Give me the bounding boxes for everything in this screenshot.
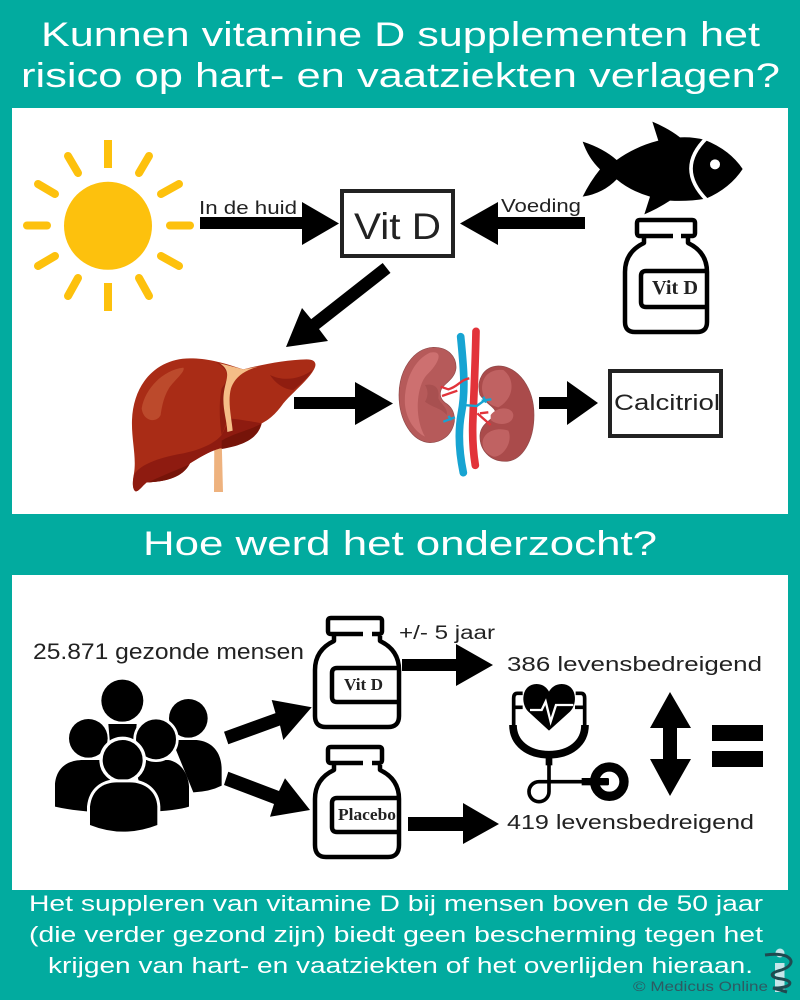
icon: Vit D bottle, study: Vit D [344, 675, 383, 694]
title: risico op hart- en vaatziekten verlagen? [21, 57, 780, 95]
icon: liver [132, 358, 315, 492]
arrow: food to vitamin D [460, 202, 585, 245]
conclusion text: (die verder gezond zijn) biedt geen bescherming tegen het [29, 922, 763, 947]
box: Calcitriol: Calcitriol [614, 390, 720, 415]
arrow: to placebo group [224, 772, 310, 817]
icon: fish [583, 122, 743, 214]
label: placebo outcome: 419 levensbedreigend [507, 812, 754, 834]
title: Kunnen vitamine D supplementen het [41, 16, 761, 54]
arrow: liver to kidneys [294, 382, 393, 425]
conclusion text: krijgen van hart- en vaatziekten of het overlijden hieraan. [48, 953, 753, 978]
panel: vitamin D pathway [12, 108, 788, 514]
icon: stethoscope with heart [513, 684, 624, 802]
label: Vit D outcome: 386 levensbedreigend [507, 654, 762, 676]
icon: group of people [55, 680, 222, 832]
icon: kidneys [399, 331, 534, 473]
box: Vit D [342, 191, 453, 256]
arrow: skin to vitamin D [200, 202, 339, 245]
copyright: © Medicus Online [633, 978, 768, 994]
icon: Vit D bottle, study [315, 618, 399, 727]
arrow: vitamin D to liver [286, 263, 390, 347]
label: voeding: Voeding [501, 196, 581, 216]
title [21, 16, 780, 95]
icon: Vit D bottle [625, 220, 707, 332]
icon: placebo bottle [315, 747, 399, 857]
arrow: Vit D outcome [402, 644, 493, 686]
conclusion text [29, 891, 763, 978]
icon: equals sign [712, 725, 763, 767]
icon: sun [27, 140, 190, 311]
conclusion text: Het suppleren van vitamine D bij mensen boven de 50 jaar [29, 891, 763, 916]
arrow: kidneys to calcitriol [539, 381, 598, 425]
arrow: to Vit D group [224, 700, 312, 744]
panel: study design [12, 575, 788, 890]
box: Vit D: Vit D [354, 206, 441, 247]
icon: placebo bottle: Placebo [338, 805, 396, 824]
arrow: up and down comparison [650, 692, 691, 796]
icon: Vit D bottle: Vit D [652, 277, 698, 299]
arrow: placebo outcome [408, 803, 499, 844]
label: participants: 25.871 gezonde mensen [33, 639, 304, 664]
heading: methods: Hoe werd het onderzocht? [143, 525, 657, 563]
label: duration: +/- 5 jaar [399, 623, 496, 644]
label: in de huid: In de huid [199, 198, 297, 218]
icon: Medicus Online logo [765, 948, 791, 992]
box: Calcitriol [610, 371, 721, 436]
